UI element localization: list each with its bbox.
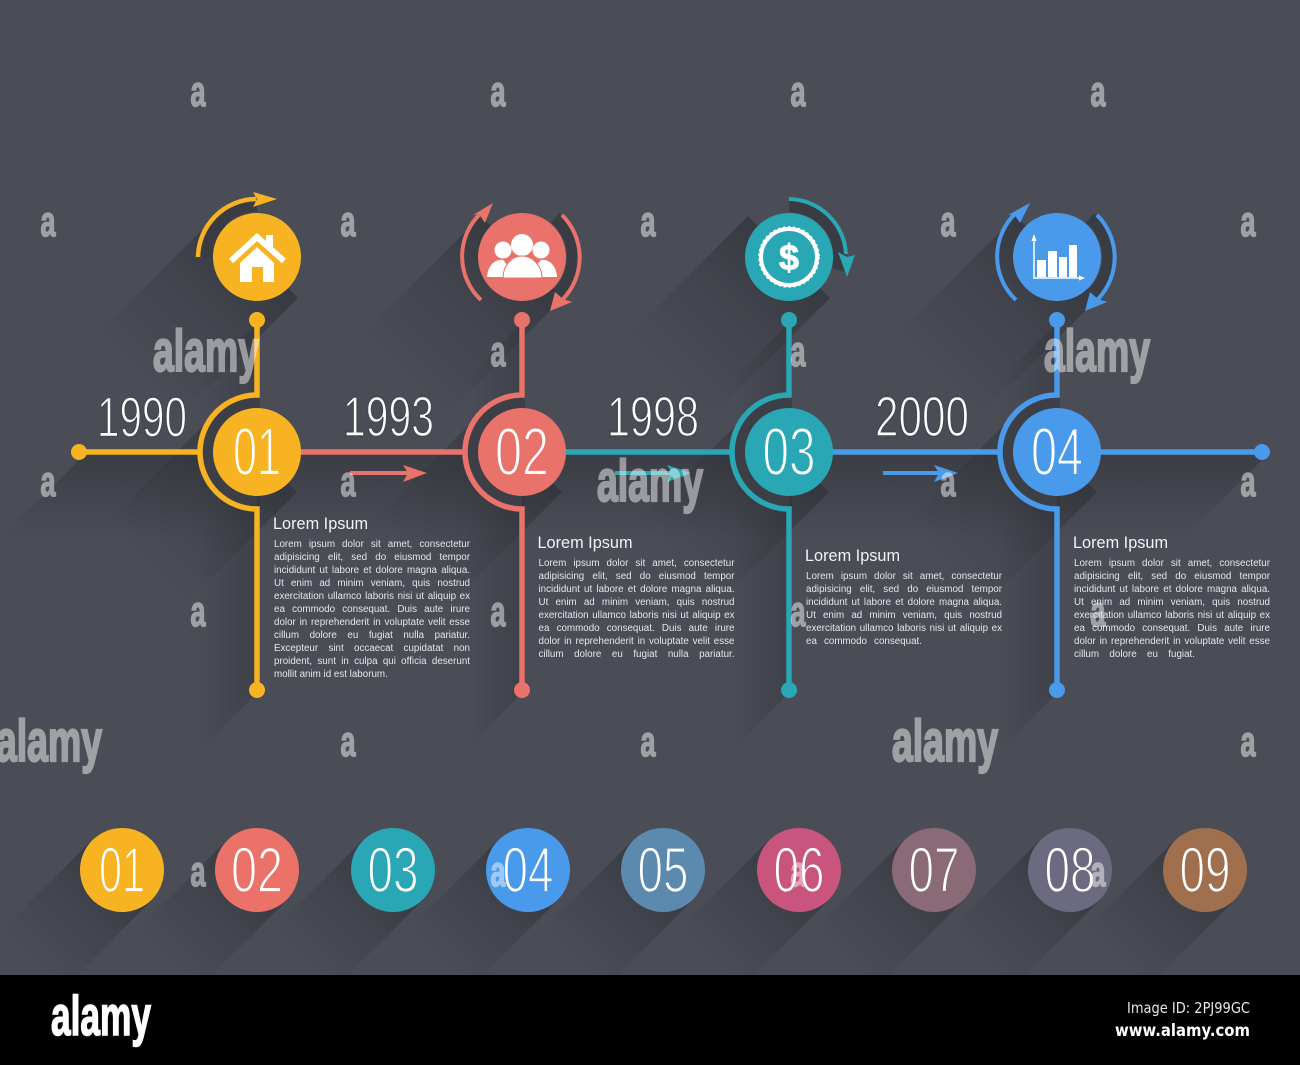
watermark: small a marks: a [190,68,206,116]
watermark: small a marks: a [1240,718,1256,766]
watermark: small a marks: a [790,68,806,116]
number badges row: 09 [1180,834,1230,906]
text block 3: incididunt ut labore et dolore magna aliqua. [806,597,1002,608]
step 3 node: 03 [762,414,816,490]
text block 4: ea commodo consequat. Duis aute irure [1074,623,1270,634]
text block 3 [805,546,1002,647]
watermark: small a marks: a [490,328,506,376]
text block 4: dolor in reprehenderit in voluptate velit esse [1074,636,1270,647]
watermark: small a marks: a [340,198,356,246]
number badges row: 06 [774,834,824,906]
watermark: small a marks: a [340,718,356,766]
number badges row: 01 [99,834,145,906]
step 1 node: 01 [233,414,281,490]
icon: people [462,203,580,311]
watermark: large alamy marks: alamy [0,709,102,774]
step 2 node: 02 [495,414,549,490]
text block 2: Lorem Ipsum [538,534,633,552]
text block 3: Ut enim ad minim veniam, quis nostrud [806,610,1002,621]
arrow: blue [883,465,958,482]
watermark: large alamy marks: alamy [153,319,259,384]
watermark: small a marks: a [490,68,506,116]
watermark: small a marks: a [190,588,206,636]
text block 1: dolor in reprehenderit in voluptate velit esse [274,617,470,628]
arrow: teal [615,465,691,482]
text block 3: ea commodo consequat. [806,636,922,647]
text block 1: Lorem Ipsum [273,514,368,532]
icon: dollar coin: $ [779,237,799,278]
icon: dollar coin [745,199,855,301]
footer bar [0,975,1300,1065]
text block 1: Excepteur sint occaecat cupidatat non [274,643,470,654]
step 2 node [465,312,566,698]
year labels: 2000 [875,385,969,449]
text block 3: Lorem ipsum dolor sit amet, consectetur [806,571,1002,582]
text block 4: Lorem Ipsum [1073,534,1168,552]
text block 4: incididunt ut labore et dolore magna aliqua. [1074,584,1270,595]
long shadows [2,216,1262,990]
watermark: small a marks: a [1090,588,1106,636]
number badges row: 03 [368,834,418,906]
text block 1: proident, sunt in culpa qui officia deserunt [274,656,470,667]
text block 2: dolor in reprehenderit in voluptate velit esse [538,636,734,647]
step 4 node [1000,312,1101,698]
step 4 node: 04 [1031,414,1083,490]
text block 4: adipisicing elit, sed do eiusmod tempor [1074,571,1270,582]
watermark: small a marks: a [190,848,206,896]
watermark: large alamy marks: alamy [892,709,998,774]
text block 2: exercitation ullamco laboris nisi ut aliquip ex [538,610,734,621]
text block 2: incididunt ut labore et dolore magna aliqua. [538,584,734,595]
horizontal timeline [71,444,1270,460]
text block 4: Lorem ipsum dolor sit amet, consectetur [1074,558,1270,569]
text block 3: exercitation ullamco laboris nisi ut aliquip ex [806,623,1002,634]
watermark: small a marks: a [40,458,56,506]
watermark: small a marks: a [490,588,506,636]
text block 3: adipisicing elit, sed do eiusmod tempor [806,584,1002,595]
year labels: 1990 [97,386,187,450]
number badges row: 04 [502,834,554,906]
number badges row: 02 [231,834,283,906]
watermark: small a marks [40,68,1256,896]
number badges row: 07 [908,834,960,906]
watermark: small a marks: a [790,588,806,636]
watermark: small a marks: a [940,198,956,246]
watermark: small a marks: a [40,198,56,246]
watermark: small a marks: a [1090,848,1106,896]
watermark: small a marks: a [790,328,806,376]
text block 2: ea commodo consequat. Duis aute irure [538,623,734,634]
text block 2: adipisicing elit, sed do eiusmod tempor [538,571,734,582]
text block 2: Lorem ipsum dolor sit amet, consectetur [538,558,734,569]
number badges row [80,828,1247,912]
footer bar: alamy [51,984,151,1047]
step 1 node [200,312,301,698]
icon: home [198,192,301,301]
watermark: small a marks: a [340,458,356,506]
text block 2: Ut enim ad minim veniam, quis nostrud [538,597,734,608]
step 3 node [732,312,833,698]
watermark: small a marks: a [790,848,806,896]
text block 3: Lorem Ipsum [805,546,900,564]
text block 1: exercitation ullamco laboris nisi ut aliquip ex [274,591,470,602]
year labels: 1993 [343,385,434,449]
watermark: small a marks: a [1240,458,1256,506]
watermark: large alamy marks [0,319,1150,774]
watermark: small a marks: a [1090,68,1106,116]
watermark: small a marks: a [940,458,956,506]
watermark: small a marks: a [1240,198,1256,246]
icon: bar chart [997,203,1115,311]
watermark: small a marks: a [640,718,656,766]
footer bar: www.alamy.com [1115,1021,1250,1041]
watermark: large alamy marks: alamy [1044,319,1150,384]
watermark: small a marks: a [490,848,506,896]
text block 1: Ut enim ad minim veniam, quis nostrud [274,578,470,589]
text block 4 [1073,534,1270,660]
text block 1: Lorem ipsum dolor sit amet, consectetur [274,539,470,550]
text block 1: cillum dolore eu fugiat nulla pariatur. [274,630,470,641]
text block 1: mollit anim id est laborum. [274,669,388,680]
text block 2 [538,534,734,660]
text block 1: adipisicing elit, sed do eiusmod tempor [274,552,470,563]
text block 1: ea commodo consequat. Duis aute irure [274,604,470,615]
year labels [97,385,969,450]
text block 4: cillum dolore eu fugiat. [1074,649,1195,660]
text block 2: cillum dolore eu fugiat nulla pariatur. [538,649,734,660]
year labels: 1998 [607,385,699,449]
text block 1 [273,514,470,680]
number badges row: 05 [638,834,688,906]
watermark: large alamy marks: alamy [597,449,703,514]
text block 1: incididunt ut labore et dolore magna aliqua. [274,565,470,576]
arrow: coral [350,465,427,482]
footer bar: Image ID: 2PJ99GC [1127,999,1250,1017]
text block 4: exercitation ullamco laboris nisi ut aliquip ex [1074,610,1270,621]
number badges row: 08 [1044,834,1096,906]
text block 4: Ut enim ad minim veniam, quis nostrud [1074,597,1270,608]
watermark: small a marks: a [640,198,656,246]
